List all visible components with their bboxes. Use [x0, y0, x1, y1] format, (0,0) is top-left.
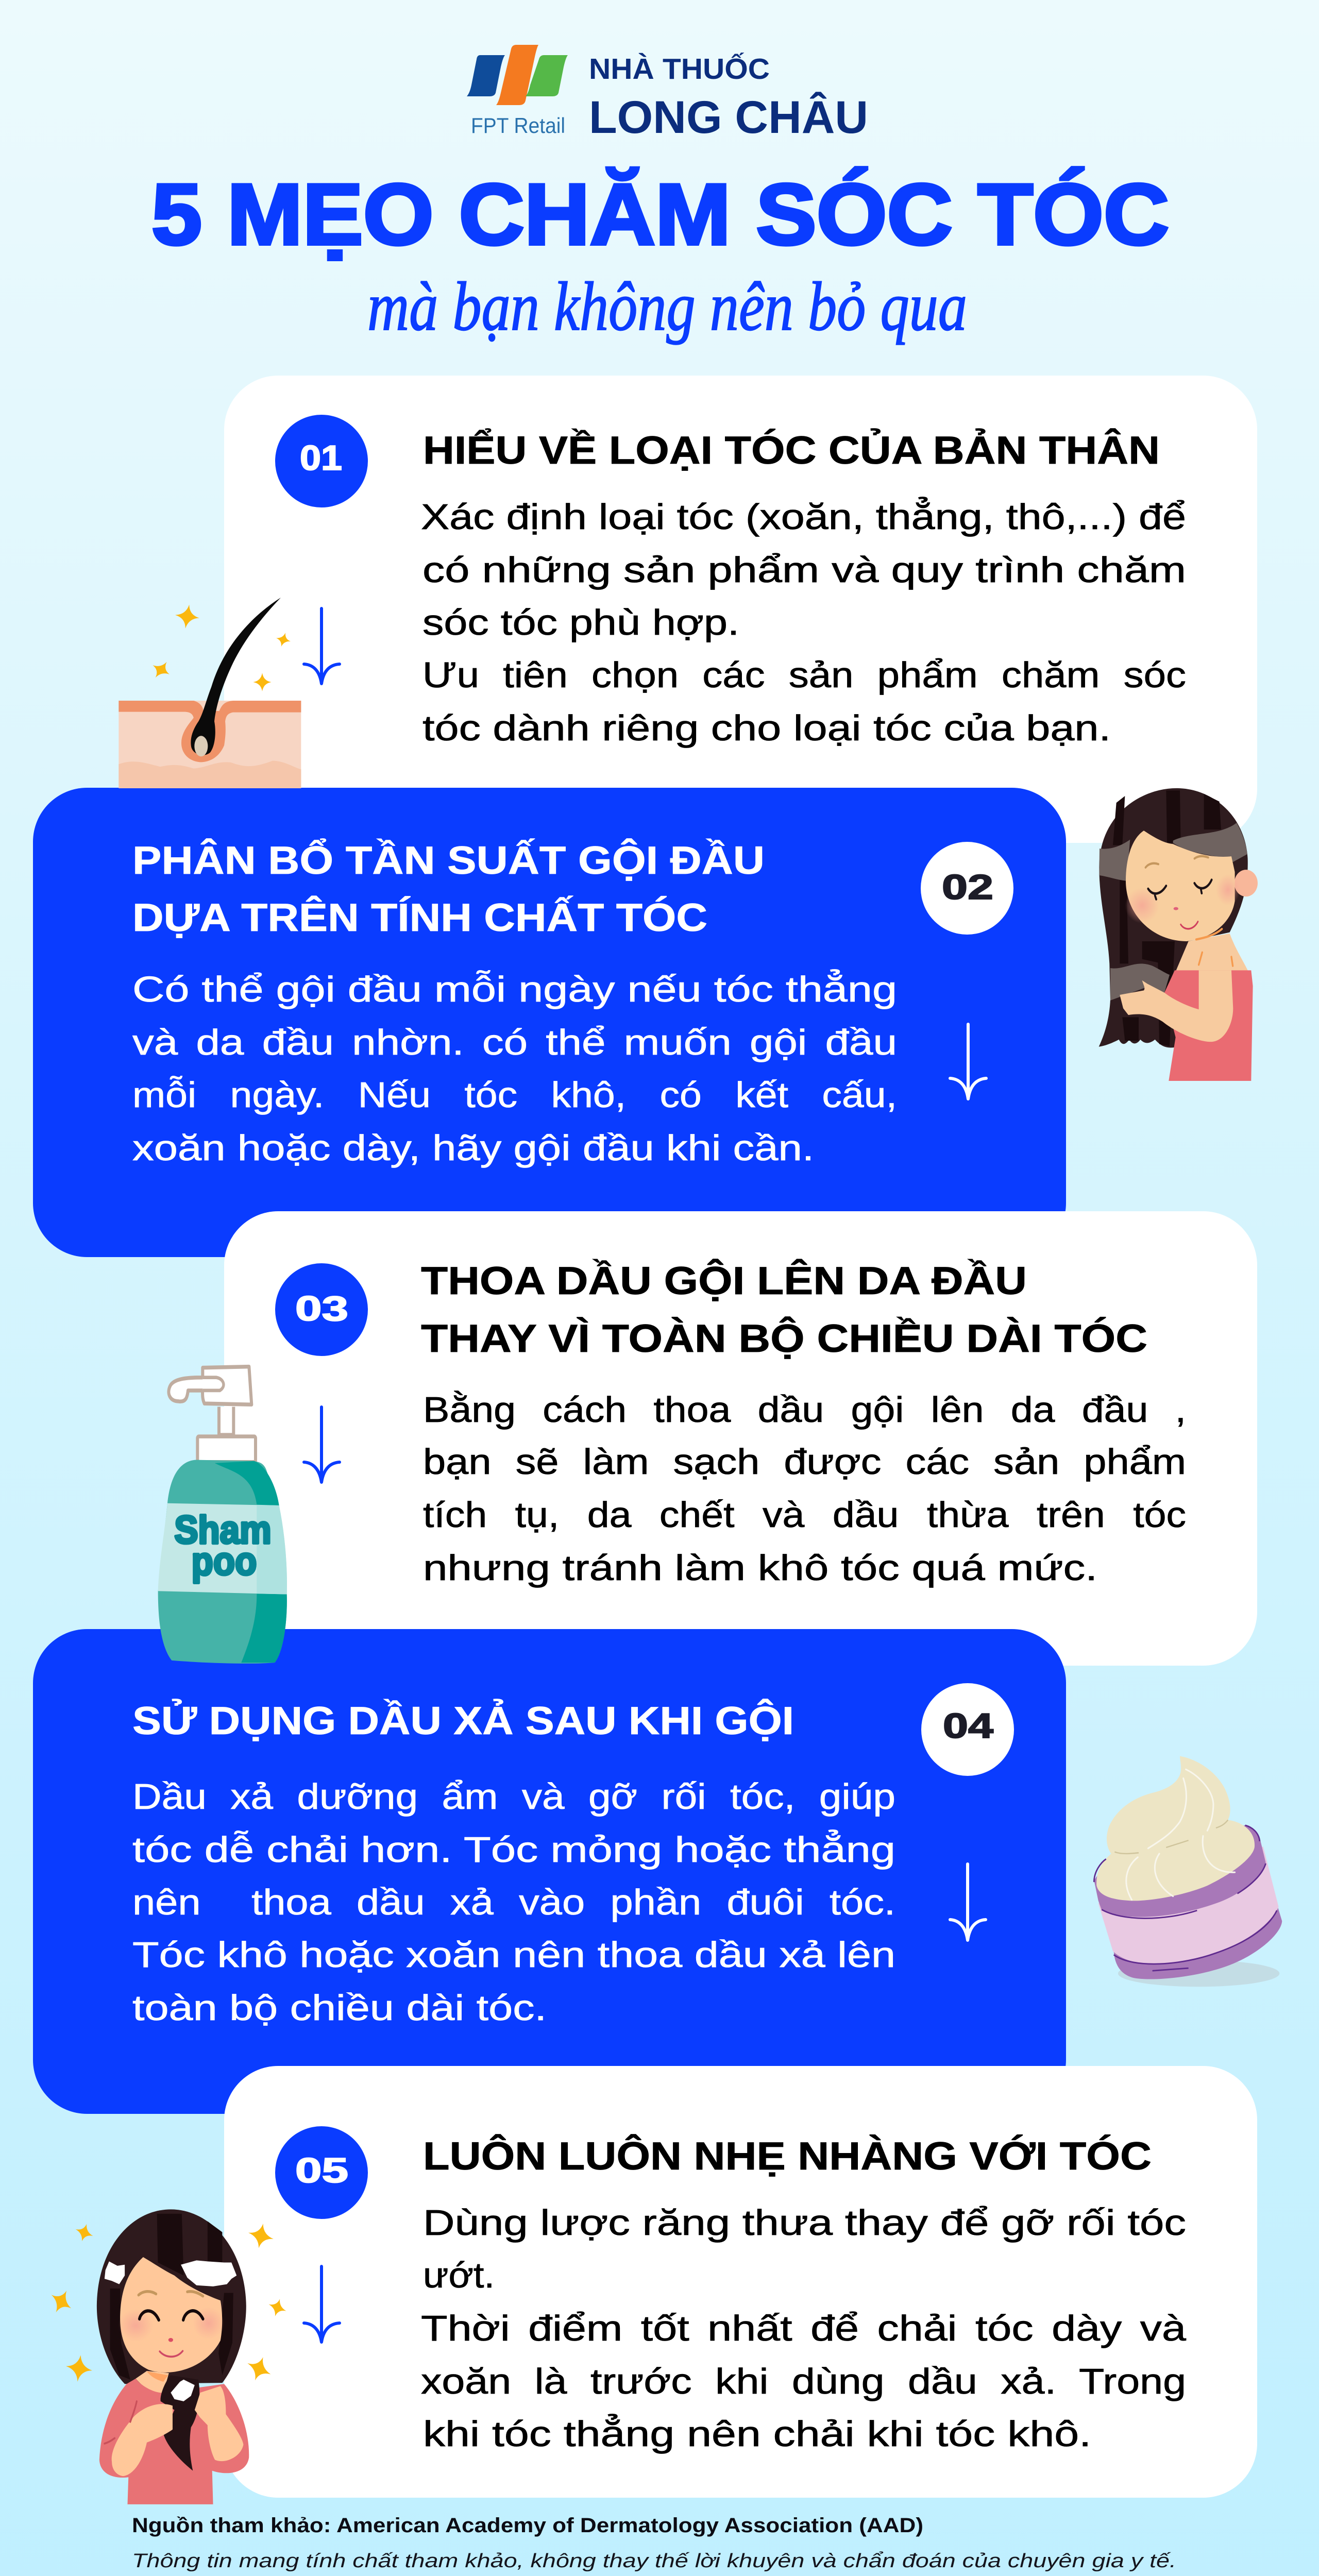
- icon: shampoo bottle: poo: [192, 1540, 257, 1583]
- body text 02: [132, 969, 897, 1168]
- body text 04: [132, 1776, 895, 2028]
- icon: smiling woman with foam in hair: [46, 2209, 289, 2504]
- arrow 01: [304, 608, 340, 684]
- body text 04: tóc dễ chải hơn. Tóc mỏng hoặc thẳng: [132, 1829, 895, 1870]
- arrow 03: [304, 1407, 340, 1482]
- disclaimer: Thông tin mang tính chất tham khảo, không thay thế lời khuyên và chẩn đoán của chuyên gia y tế.: [132, 2550, 1176, 2572]
- body text 04: toàn bộ chiều dài tóc.: [132, 1988, 547, 2028]
- arrow 05: [304, 2266, 340, 2342]
- body text 02: mỗi ngày. Nếu tóc khô, có kết cấu,: [132, 1075, 897, 1115]
- body text 01: [421, 496, 1186, 748]
- body text 01: Ưu tiên chọn các sản phẩm chăm sóc: [422, 655, 1186, 695]
- body text 03: [423, 1389, 1186, 1588]
- number badge 01: 01: [300, 438, 342, 478]
- body text 05: ướt.: [423, 2255, 495, 2295]
- logo: FPT Retail Long Châu: FPT Retail: [471, 113, 565, 138]
- body text 03: nhưng tránh làm khô tóc quá mức.: [423, 1548, 1097, 1588]
- body text 05: Dùng lược răng thưa thay để gỡ rối tóc: [423, 2202, 1186, 2243]
- source note: Nguồn tham khảo: American Academy of Dermatology Association (AAD): [132, 2514, 923, 2537]
- panel: tip 03: [224, 1211, 1257, 1666]
- body text 01: có những sản phẩm và quy trình chăm: [422, 550, 1186, 590]
- heading 03: THAY VÌ TOÀN BỘ CHIỀU DÀI TÓC: [421, 1317, 1147, 1361]
- number badge 03: 03: [295, 1289, 348, 1328]
- title: 5 MẸO CHĂM SÓC TÓC: [151, 166, 1169, 263]
- body text 05: xoăn là trước khi dùng dầu xả. Trong: [421, 2361, 1186, 2401]
- subtitle: mà bạn không nên bỏ qua: [367, 268, 967, 345]
- arrow 04: [950, 1864, 986, 1940]
- body text 02: và da đầu nhờn. có thể muốn gội đầu: [132, 1022, 897, 1062]
- logo: FPT Retail Long Châu: LONG CHÂU: [589, 91, 868, 143]
- number badge 05: 05: [295, 2151, 348, 2190]
- body text 01: tóc dành riêng cho loại tóc của bạn.: [422, 708, 1111, 748]
- panel: tip 04: [33, 1629, 1066, 2114]
- arrow 02: [950, 1024, 986, 1099]
- body text 04: Tóc khô hoặc xoăn nên thoa dầu xả lên: [132, 1935, 895, 1975]
- heading 02: DỰA TRÊN TÍNH CHẤT TÓC: [132, 895, 707, 940]
- logo: FPT Retail Long Châu: NHÀ THUỐC: [589, 52, 770, 86]
- number badge 02: [921, 842, 1013, 935]
- body text 04: nên thoa dầu xả vào phần đuôi tóc.: [132, 1882, 895, 1922]
- panel: tip 02: [33, 788, 1066, 1257]
- heading 04: SỬ DỤNG DẦU XẢ SAU KHI GỘI: [132, 1699, 794, 1743]
- icon: shampoo bottle: Sham: [174, 1509, 272, 1552]
- panel: tip 05: [224, 2066, 1257, 2498]
- body text 01: Xác định loại tóc (xoăn, thẳng, thô,...) để: [421, 496, 1186, 537]
- body text 05: khi tóc thẳng nên chải khi tóc khô.: [423, 2413, 1091, 2454]
- logo: FPT Retail Long Châu: [467, 45, 868, 143]
- body text 03: bạn sẽ làm sạch được các sản phẩm: [423, 1442, 1186, 1482]
- icon: woman stroking long hair: [1099, 788, 1258, 1081]
- number badge 05: [275, 2126, 368, 2219]
- number badge 01: [275, 415, 368, 507]
- icon: hair follicle: [119, 598, 301, 788]
- number badge 04: 04: [943, 1706, 993, 1745]
- icon: conditioner cream jar: [1094, 1756, 1282, 1987]
- number badge 02: 02: [942, 868, 993, 907]
- number badge 04: [921, 1683, 1014, 1776]
- panel: tip 01: [224, 376, 1257, 843]
- heading 03: [421, 1259, 1147, 1361]
- heading 01: HIỂU VỀ LOẠI TÓC CỦA BẢN THÂN: [423, 428, 1160, 472]
- body text 04: Dầu xả dưỡng ẩm và gỡ rối tóc, giúp: [132, 1776, 895, 1817]
- body text 03: tích tụ, da chết và dầu thừa trên tóc: [423, 1495, 1186, 1535]
- icon: shampoo bottle: [158, 1367, 287, 1664]
- body text 01: sóc tóc phù hợp.: [422, 602, 739, 642]
- body text 05: [421, 2202, 1186, 2454]
- body text 05: Thời điểm tốt nhất để chải tóc dày và: [421, 2308, 1186, 2348]
- heading 03: THOA DẦU GỘI LÊN DA ĐẦU: [421, 1259, 1027, 1303]
- number badge 03: [275, 1263, 368, 1356]
- body text 03: Bằng cách thoa dầu gội lên da đầu ,: [423, 1389, 1186, 1430]
- heading 02: PHÂN BỔ TẦN SUẤT GỘI ĐẦU: [132, 838, 765, 883]
- body text 02: xoăn hoặc dày, hãy gội đầu khi cần.: [132, 1128, 814, 1168]
- heading 02: [132, 838, 765, 940]
- body text 02: Có thể gội đầu mỗi ngày nếu tóc thẳng: [132, 969, 897, 1009]
- heading 05: LUÔN LUÔN NHẸ NHÀNG VỚI TÓC: [423, 2134, 1152, 2178]
